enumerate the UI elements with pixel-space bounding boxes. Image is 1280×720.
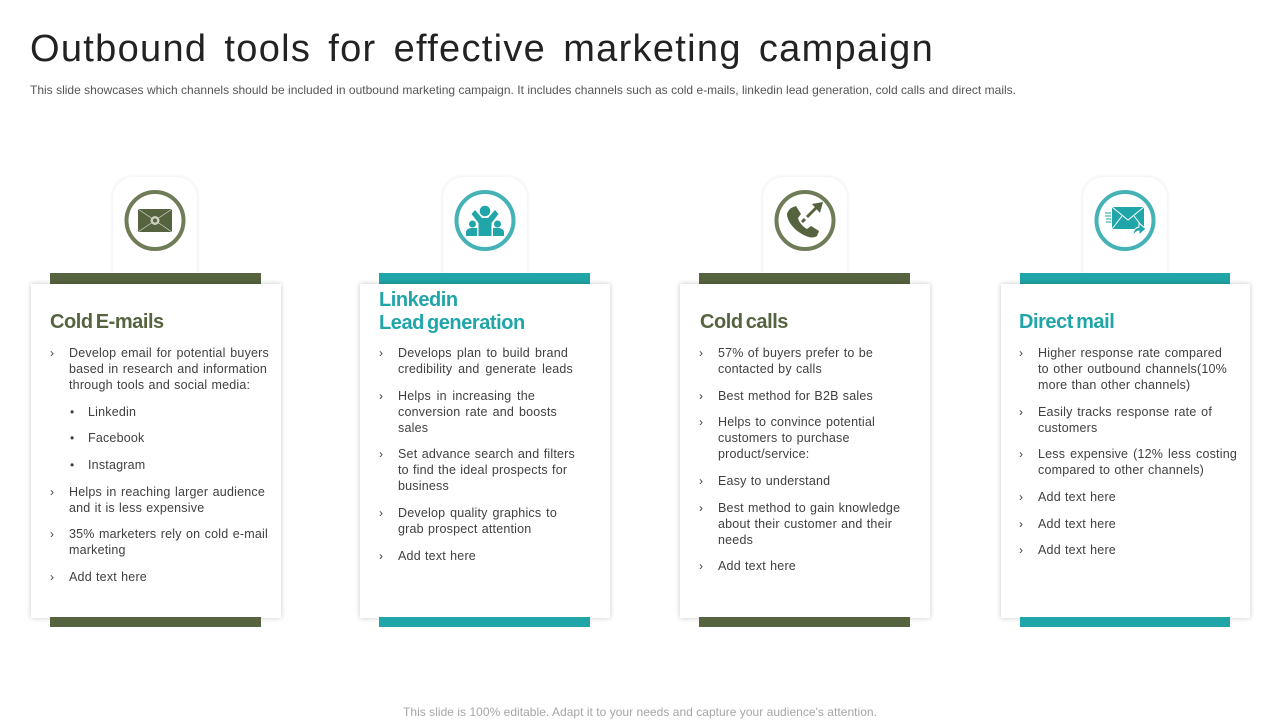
bullet list — [50, 346, 269, 584]
icon: phone — [774, 190, 836, 251]
bullet list: Add text here — [69, 570, 147, 584]
bullet list: Develop email for potential buyers — [69, 346, 269, 360]
heading: Linkedin — [379, 289, 458, 311]
bullet list: credibility and generate leads — [398, 362, 573, 376]
bullet list: more than other channels) — [1038, 378, 1190, 392]
panel: linkedin lead generation — [358, 176, 612, 627]
heading: Cold E-mails — [50, 311, 164, 333]
bottom bar — [50, 617, 261, 627]
card body — [1001, 284, 1250, 618]
bottom bar — [379, 617, 590, 627]
bullet list: Add text here — [1038, 490, 1116, 504]
bullet list: 57% of buyers prefer to be — [718, 346, 873, 360]
title: Outbound tools for effective marketing campaign — [30, 28, 934, 70]
bullet list — [379, 346, 575, 563]
bullet list: sales — [398, 421, 428, 435]
bottom bar — [1020, 617, 1230, 627]
bullet list: › — [1019, 346, 1023, 360]
panel: cold e-mails — [28, 176, 284, 627]
heading: Cold calls — [700, 311, 788, 333]
bullet list: customers — [1038, 421, 1097, 435]
bullet list: Develop quality graphics to — [398, 506, 557, 520]
bullet list: and it is less expensive — [69, 501, 204, 515]
bullet list: Best method for B2B sales — [718, 389, 873, 403]
bullet list: Easily tracks response rate of — [1038, 405, 1212, 419]
bullet list: › — [699, 501, 703, 515]
bullet list: Higher response rate compared — [1038, 346, 1222, 360]
icon tab: mail — [1083, 177, 1167, 274]
bullet list: Easy to understand — [718, 474, 830, 488]
bullet list: › — [699, 389, 703, 403]
bullet list: › — [50, 485, 54, 499]
panel: cold calls — [678, 176, 932, 627]
bullet list: › — [699, 559, 703, 573]
top bar — [699, 273, 910, 284]
bullet list: business — [398, 479, 449, 493]
bullet list: Add text here — [718, 559, 796, 573]
bullet list: › — [50, 570, 54, 584]
top bar — [1020, 273, 1230, 284]
bullet list: Instagram — [88, 458, 145, 472]
bullet list: › — [379, 447, 383, 461]
card body — [680, 284, 930, 618]
bullet list: based in research and information — [69, 362, 267, 376]
bullet list: to find the ideal prospects for — [398, 463, 567, 477]
bullet list: › — [50, 527, 54, 541]
bullet list: • — [70, 405, 74, 419]
bullet list: › — [50, 346, 54, 360]
bullet list: › — [379, 389, 383, 403]
bullet list: Helps in increasing the — [398, 389, 535, 403]
bullet list: about their customer and their — [718, 517, 892, 531]
bullet list: Helps to convince potential — [718, 415, 875, 429]
bullet list: Add text here — [1038, 517, 1116, 531]
icon tab: cold e-mails — [113, 177, 197, 274]
bullet list: • — [70, 458, 74, 472]
card body — [360, 284, 610, 618]
bullet list: to other outbound channels(10% — [1038, 362, 1227, 376]
heading — [379, 289, 525, 334]
bullet list: • — [70, 431, 74, 445]
bullet list: Add text here — [1038, 543, 1116, 557]
heading: Direct mail — [1019, 311, 1114, 333]
bullet list: › — [379, 346, 383, 360]
heading: Lead generation — [379, 312, 525, 334]
bullet list: › — [1019, 543, 1023, 557]
bullet list: compared to other channels) — [1038, 463, 1204, 477]
bullet list: › — [699, 415, 703, 429]
bullet list: › — [1019, 517, 1023, 531]
bullet list: Best method to gain knowledge — [718, 501, 900, 515]
bullet list: › — [1019, 447, 1023, 461]
bullet list: contacted by calls — [718, 362, 822, 376]
bullet list: › — [1019, 405, 1023, 419]
top bar — [379, 273, 590, 284]
bullet list: › — [699, 474, 703, 488]
bullet list: through tools and social media: — [69, 378, 250, 392]
bullet list: › — [379, 506, 383, 520]
card body — [31, 284, 281, 618]
bullet list: Facebook — [88, 431, 144, 445]
top bar — [50, 273, 261, 284]
bullet list — [1019, 346, 1237, 557]
panel: direct mail — [998, 176, 1252, 627]
bullet list: 35% marketers rely on cold e-mail — [69, 527, 268, 541]
icon tab: linkedin — [443, 177, 527, 274]
bullet list: Linkedin — [88, 405, 136, 419]
bullet list — [699, 346, 900, 573]
icon tab: phone — [763, 177, 847, 274]
bullet list: grab prospect attention — [398, 522, 531, 536]
subtitle: This slide showcases which channels should be included in outbound marketing campaign. It includes channels such as cold e-mails, linkedin lead generation, cold calls and direct mails. — [30, 83, 1016, 97]
icon: people — [454, 190, 516, 251]
footer note: This slide is 100% editable. Adapt it to your needs and capture your audience's attention. — [403, 705, 877, 719]
bullet list: Set advance search and filters — [398, 447, 575, 461]
bullet list: Develops plan to build brand — [398, 346, 568, 360]
bullet list: › — [699, 346, 703, 360]
icon: mail forward — [1094, 190, 1156, 251]
icon: envelope — [124, 190, 186, 251]
bullet list: › — [1019, 490, 1023, 504]
bullet list: marketing — [69, 543, 126, 557]
bottom bar — [699, 617, 910, 627]
bullet list: product/service: — [718, 447, 809, 461]
bullet list: conversion rate and boosts — [398, 405, 557, 419]
bullet list: needs — [718, 533, 753, 547]
bullet list: customers to purchase — [718, 431, 850, 445]
bullet list: › — [379, 549, 383, 563]
bullet list: Helps in reaching larger audience — [69, 485, 265, 499]
bullet list: Add text here — [398, 549, 476, 563]
bullet list: Less expensive (12% less costing — [1038, 447, 1237, 461]
